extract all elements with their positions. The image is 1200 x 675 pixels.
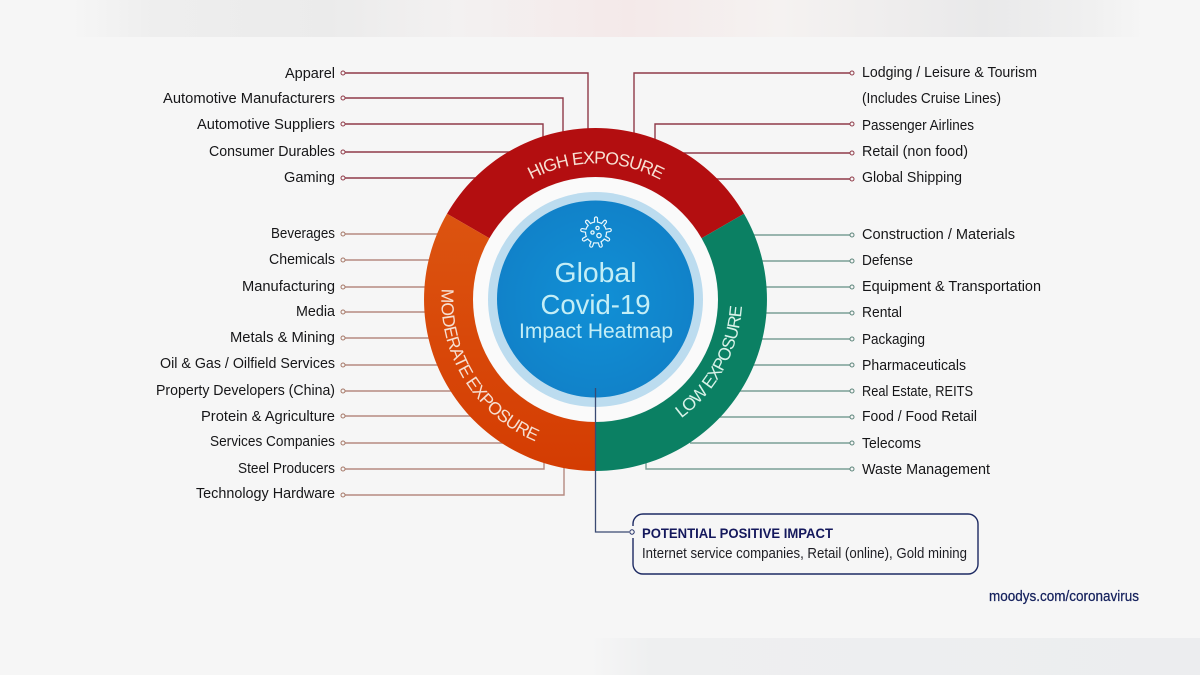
labels: moderate exposure: Property Developers (China) xyxy=(156,382,335,399)
labels: low exposure: Defense xyxy=(862,252,913,269)
ring label: high exposure: HIGH EXPOSURE xyxy=(527,151,665,180)
labels: high exposure, right: Global Shipping xyxy=(862,169,962,186)
labels: moderate exposure: Technology Hardware xyxy=(196,485,335,502)
callout: potential positive impact: Internet service companies, Retail (online), Gold mining xyxy=(642,545,967,562)
connector lines: high exposure, left xyxy=(341,71,588,180)
callout: potential positive impact xyxy=(630,514,978,574)
exposure ring xyxy=(424,128,767,471)
labels: low exposure: Real Estate, REITS xyxy=(862,383,973,400)
ring label: low exposure: LOW EXPOSURE xyxy=(675,306,742,418)
labels: high exposure, left: Gaming xyxy=(284,169,335,186)
source link: moodys.com/coronavirus xyxy=(989,588,1139,605)
labels: high exposure, right: Lodging / Leisure & Tourism xyxy=(862,64,1037,81)
labels: low exposure xyxy=(862,226,1041,478)
labels: high exposure, right xyxy=(862,64,1037,186)
labels: high exposure, left: Automotive Suppliers xyxy=(197,116,335,133)
bottom blurred band xyxy=(590,638,1200,675)
labels: low exposure: Pharmaceuticals xyxy=(862,357,966,374)
ring label: moderate exposure: MODERATE EXPOSURE xyxy=(441,290,540,442)
ring segment: moderate exposure xyxy=(424,214,596,471)
title xyxy=(519,257,673,343)
connector lines: low exposure xyxy=(646,233,854,471)
labels: low exposure: Equipment & Transportation xyxy=(862,278,1041,295)
labels: low exposure: Waste Management xyxy=(862,461,991,478)
title: Impact Heatmap xyxy=(519,320,673,343)
icon: virus xyxy=(582,218,610,246)
labels: moderate exposure: Oil & Gas / Oilfield Services xyxy=(160,355,335,372)
labels: moderate exposure xyxy=(156,225,336,502)
connector to positive impact box xyxy=(596,388,629,532)
callout: potential positive impact: POTENTIAL POSITIVE IMPACT xyxy=(642,525,833,541)
labels: moderate exposure: Manufacturing xyxy=(242,278,335,295)
labels: moderate exposure: Media xyxy=(296,303,336,320)
labels: high exposure, left: Apparel xyxy=(285,65,335,82)
labels: low exposure: Rental xyxy=(862,304,902,321)
labels: moderate exposure: Metals & Mining xyxy=(230,329,335,346)
top blurred band xyxy=(70,0,1145,37)
title: Covid-19 xyxy=(540,289,650,320)
labels: low exposure: Telecoms xyxy=(862,435,921,452)
labels: high exposure, right: (Includes Cruise Lines) xyxy=(862,90,1001,107)
connector lines: high exposure, right xyxy=(634,71,854,181)
labels: moderate exposure: Protein & Agriculture xyxy=(201,408,335,425)
labels: high exposure, left: Automotive Manufacturers xyxy=(163,90,335,107)
labels: high exposure, right: Passenger Airlines xyxy=(862,117,974,134)
labels: high exposure, left: Consumer Durables xyxy=(209,143,335,160)
connector lines: moderate exposure xyxy=(341,232,564,497)
labels: moderate exposure: Services Companies xyxy=(210,433,335,450)
labels: moderate exposure: Steel Producers xyxy=(238,460,335,477)
labels: moderate exposure: Beverages xyxy=(271,225,335,242)
labels: high exposure, right: Retail (non food) xyxy=(862,143,968,160)
labels: low exposure: Construction / Materials xyxy=(862,226,1015,243)
title: Global xyxy=(554,257,636,288)
ring segment: low exposure xyxy=(596,214,767,471)
labels: moderate exposure: Chemicals xyxy=(269,251,335,268)
central disc xyxy=(474,178,718,422)
labels: high exposure, left xyxy=(163,65,335,186)
ring segment: high exposure xyxy=(447,128,744,238)
labels: low exposure: Packaging xyxy=(862,331,925,348)
labels: low exposure: Food / Food Retail xyxy=(862,408,977,425)
